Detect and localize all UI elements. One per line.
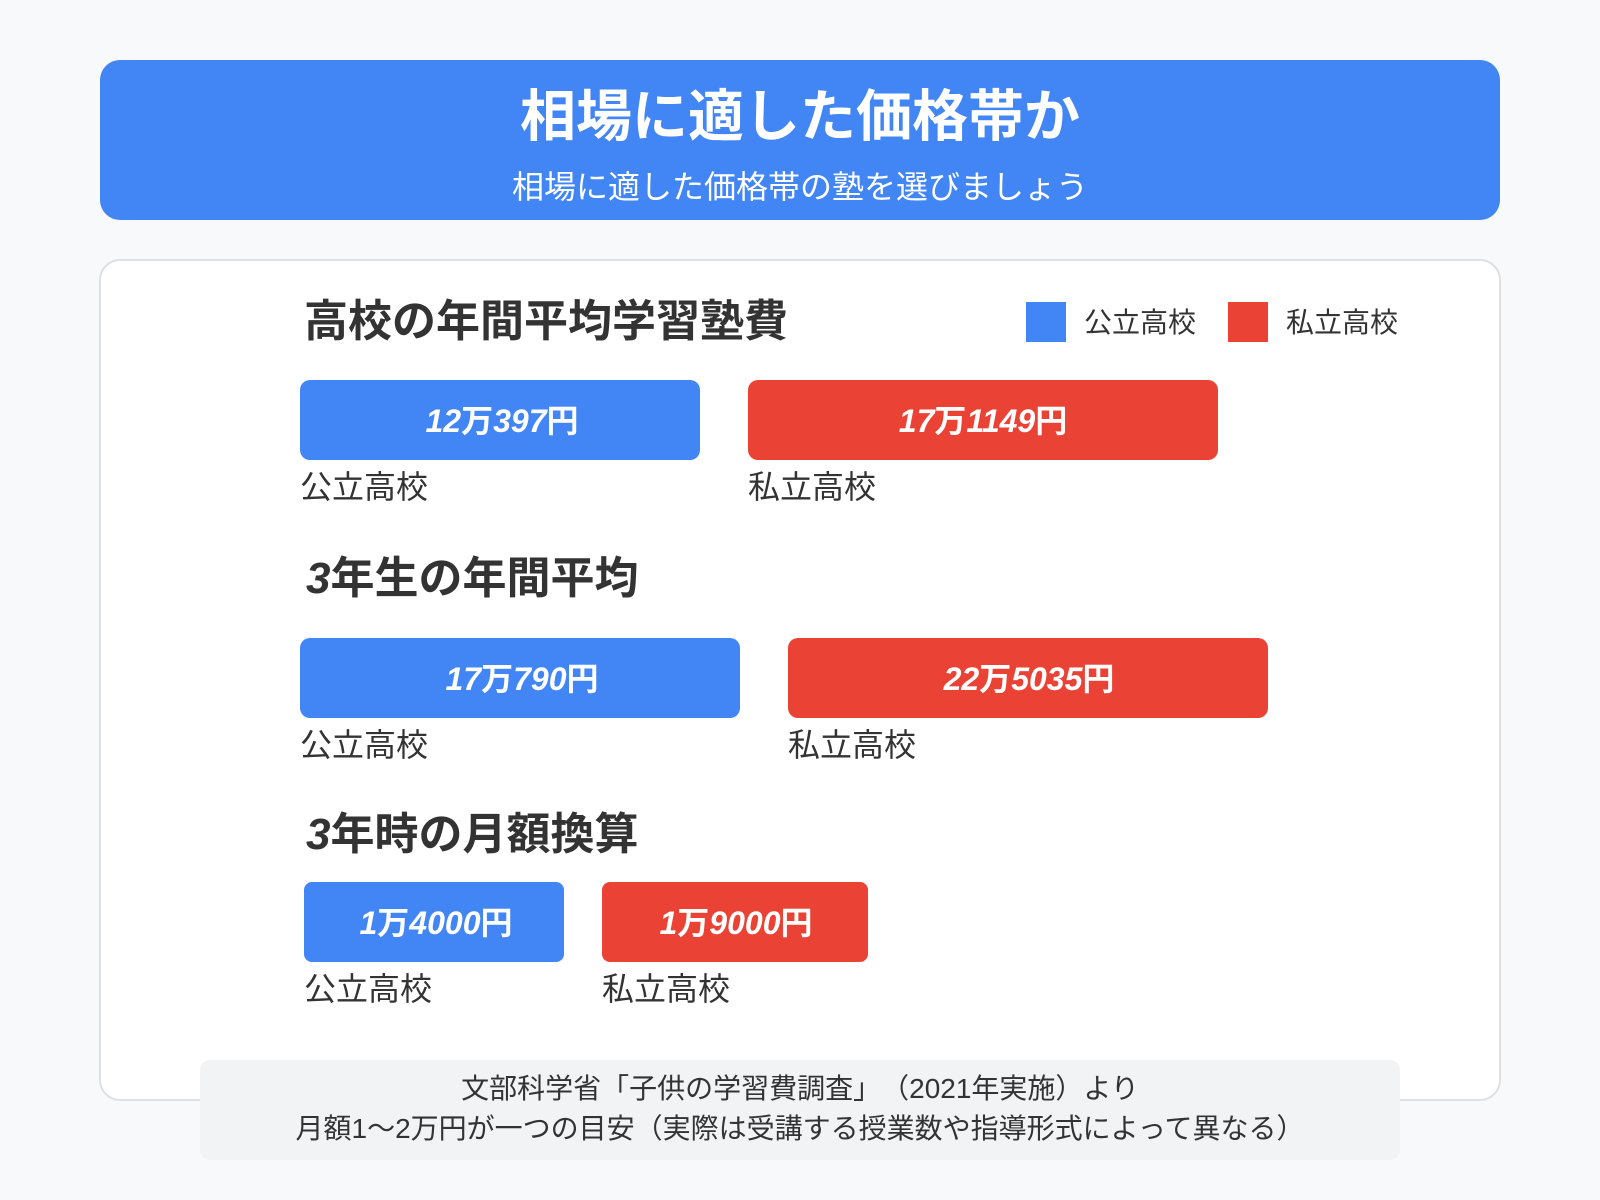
bar: public third-year annual [300,638,740,763]
bar: public high school annual [300,380,700,505]
bar: private third-year annual: 22万5035円 [943,661,1114,697]
bar: private monthly: 1万9000円 [659,905,813,941]
bar: private third-year annual [788,638,1268,763]
bar: private third-year annual: 私立高校 [788,727,916,763]
bar: public third-year annual: 17万790円 [445,661,599,697]
title: 相場に適した価格帯か [520,85,1080,148]
header banner [100,60,1500,220]
bar: public monthly: 公立高校 [304,971,432,1007]
bar: private monthly: 私立高校 [602,971,730,1007]
note box: 月額1〜2万円が一つの目安（実際は受講する授業数や指導形式によって異なる） [296,1113,1304,1144]
bar: public monthly [304,882,564,1007]
legend [1026,302,1398,342]
note box [200,1060,1400,1160]
bar: private high school annual: 17万1149円 [899,403,1067,439]
bar: private high school annual: 私立高校 [748,469,876,505]
panel: chart card [100,260,1500,1100]
note box: 文部科学省「子供の学習費調査」（2021年実施）より [461,1073,1139,1104]
bar: public high school annual: 12万397円 [425,403,579,439]
heading: annual average: 高校の年間平均学習塾費 [304,297,788,346]
bar: public high school annual: 公立高校 [300,469,428,505]
bar: public monthly: 1万4000円 [359,905,513,941]
bar: private monthly [602,882,868,1007]
subtitle: 相場に適した価格帯の塾を選びましょう [512,169,1088,205]
heading: third-year annual average: 3年生の年間平均 [306,554,638,603]
legend: 私立高校 [1286,307,1398,338]
heading: third-year monthly: 3年時の月額換算 [306,810,638,859]
bar: private high school annual [748,380,1218,505]
legend: 公立高校 [1084,307,1196,338]
bar: public third-year annual: 公立高校 [300,727,428,763]
